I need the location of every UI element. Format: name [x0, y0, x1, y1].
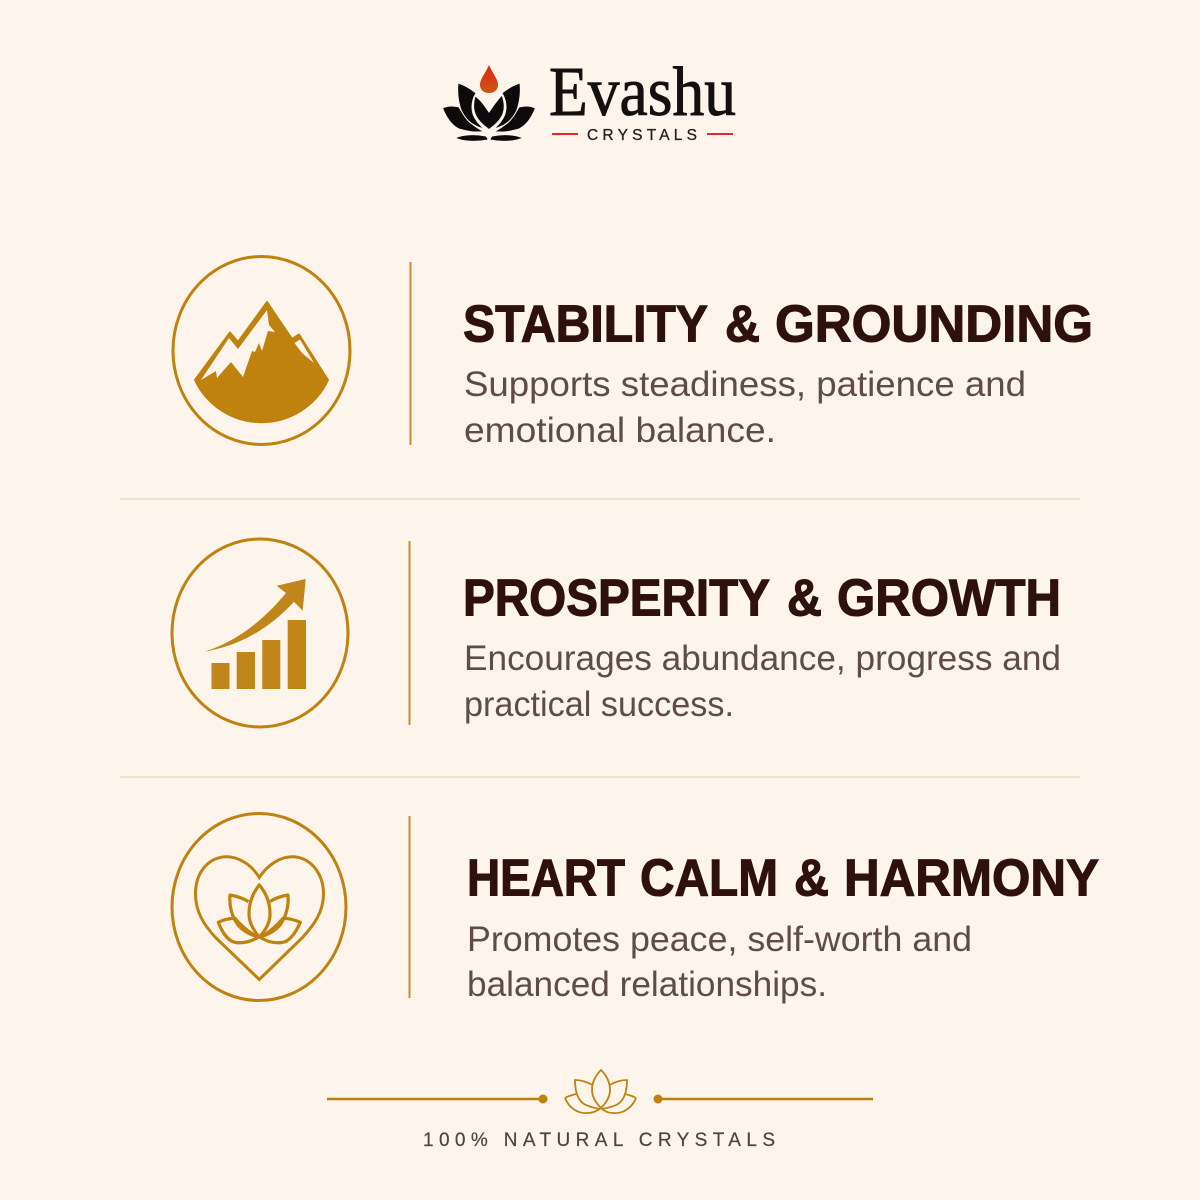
divider — [410, 262, 412, 445]
heading — [467, 850, 1099, 908]
ornament: lines and lotus — [327, 1070, 873, 1113]
tagline: CRYSTALS — [587, 127, 697, 144]
wordmark: Evashu — [549, 54, 736, 131]
icon: rising chart in circle — [172, 539, 348, 727]
description — [467, 920, 972, 1004]
heading: GROWTH — [837, 570, 1061, 628]
description — [464, 639, 1061, 724]
heading: GROUNDING — [775, 296, 1093, 354]
icon: heart with lotus in circle — [172, 814, 346, 1000]
description: balanced relationships. — [467, 965, 827, 1004]
description: Encourages abundance, progress and — [464, 639, 1061, 678]
heading: HARMONY — [844, 850, 1099, 908]
heading: STABILITY — [463, 296, 708, 354]
heading: & — [725, 296, 760, 354]
logo: Evashu Crystals — [442, 54, 736, 144]
heading: HEART — [467, 850, 625, 908]
description — [464, 365, 1026, 450]
description: emotional balance. — [464, 411, 776, 450]
panel: prosperity and growth — [172, 539, 1061, 727]
heading: & — [794, 850, 829, 908]
description: practical success. — [464, 685, 734, 724]
footer: natural crystals badge — [327, 1070, 873, 1151]
description: Promotes peace, self-worth and — [467, 920, 972, 959]
icon: mountain in circle — [173, 256, 350, 444]
description: Supports steadiness, patience and — [464, 365, 1026, 404]
heading: & — [787, 570, 822, 628]
icon: lotus with red drop — [442, 65, 536, 141]
heading — [463, 570, 1061, 628]
heading — [463, 296, 1093, 354]
panel: heart calm and harmony — [172, 814, 1099, 1004]
panel: stability and grounding — [173, 256, 1093, 450]
heading: CALM — [640, 850, 778, 908]
heading: PROSPERITY — [463, 570, 770, 628]
divider — [408, 541, 410, 725]
label: 100% NATURAL CRYSTALS — [423, 1130, 775, 1151]
divider — [408, 816, 410, 998]
